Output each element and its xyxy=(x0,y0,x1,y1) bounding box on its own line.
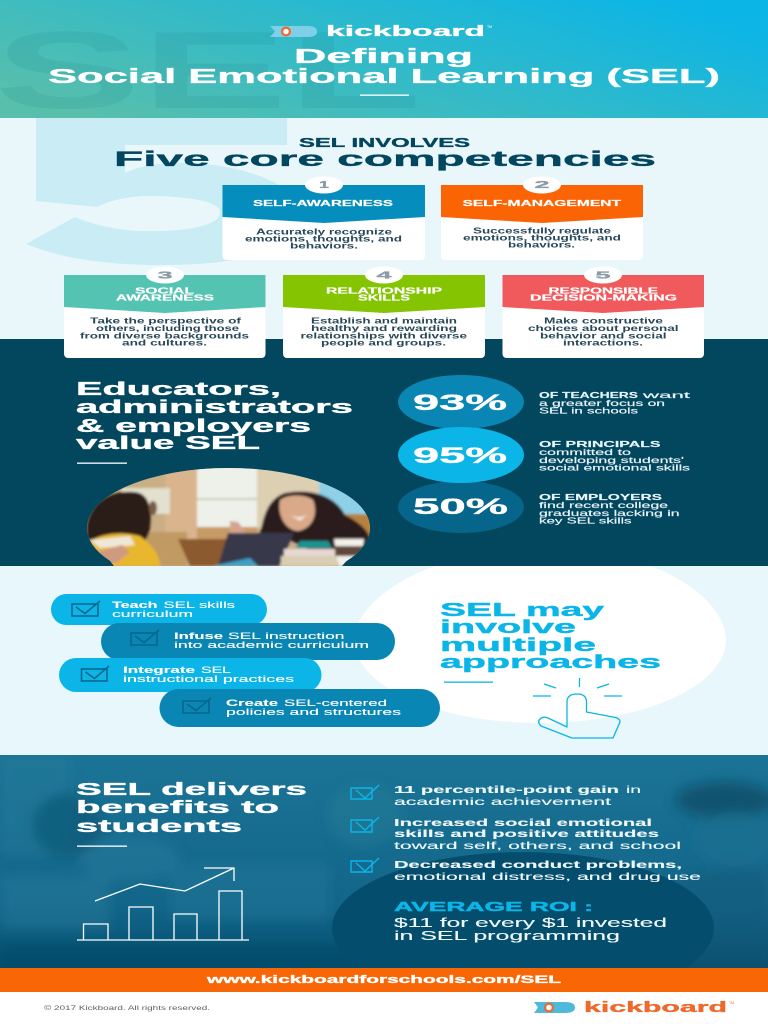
benefit 1: academic achievement: academic achievement xyxy=(394,797,611,808)
benefit 1: academic achievement xyxy=(351,785,642,808)
card 3: social awareness: and cultures. xyxy=(122,338,207,348)
panel: five core competencies xyxy=(0,118,768,339)
heading: SEL may involve multiple approaches: multiple xyxy=(440,634,596,655)
benefit 3: decreased conduct problems xyxy=(351,858,702,883)
copyright: © 2017 Kickboard. All rights reserved. xyxy=(44,1005,211,1012)
stat: 50% of employers: 50% xyxy=(413,494,508,519)
benefit 2: social emotional skills: Increased social emotional xyxy=(394,818,652,829)
card 4: relationship skills xyxy=(283,266,485,358)
section heading: SEL INVOLVES xyxy=(299,136,470,150)
benefit 1: academic achievement: in xyxy=(626,785,642,796)
title: Defining xyxy=(294,45,473,68)
card 5: responsible decision-making: interactions. xyxy=(563,338,643,348)
heading: educators value SEL: & employers xyxy=(76,416,311,436)
card 5: responsible decision-making: Make constructive xyxy=(544,316,664,326)
logo: kickboard footer: TM xyxy=(729,1001,734,1005)
icon: rising bar chart xyxy=(77,868,249,940)
callout: average ROI: $11 for every $1 invested xyxy=(394,916,667,930)
card 4: relationship skills: RELATIONSHIP xyxy=(326,286,442,296)
benefit 2: social emotional skills xyxy=(351,817,681,852)
card 1: self-awareness: 1 xyxy=(319,179,329,191)
stat: 93% of teachers: a greater focus on xyxy=(539,399,666,408)
logo: kickboard footer xyxy=(534,1000,734,1016)
stat: 93% of teachers xyxy=(398,375,692,429)
card 2: self-management: Successfully regulate xyxy=(473,226,612,236)
card 1: self-awareness: Accurately recognize xyxy=(256,228,393,236)
orange URL banner xyxy=(0,968,768,992)
card 1: self-awareness: behaviors. xyxy=(290,242,358,250)
heading: educators value SEL: value SEL xyxy=(76,433,260,453)
benefit 3: decreased conduct problems: emotional distress, and drug use xyxy=(394,872,702,883)
SEL watermark: SEL xyxy=(0,9,422,132)
ROI backdrop circle xyxy=(332,852,714,968)
card 4: relationship skills: Establish and maintain xyxy=(311,316,457,326)
stat: 95% of principals: 95% xyxy=(413,443,507,468)
pill: create xyxy=(160,689,440,727)
stat: 50% of employers: key SEL skills xyxy=(539,516,632,526)
heading: SEL delivers benefits to students xyxy=(76,779,308,847)
card 3: social awareness xyxy=(64,266,266,358)
card 3: social awareness: 3 xyxy=(158,270,173,282)
pill: infuse: Infuse xyxy=(174,631,223,641)
panel: approaches xyxy=(0,566,768,755)
pill: infuse: SEL instruction xyxy=(228,631,345,641)
card 4: relationship skills: relationships with diverse xyxy=(300,332,468,340)
pill: integrate: instructional practices xyxy=(123,674,295,684)
card 4: relationship skills: healthy and rewarding xyxy=(311,324,457,333)
stat: 93% of teachers: 93% xyxy=(413,390,507,415)
pill: integrate: SEL xyxy=(201,665,231,675)
stat: 50% of employers: graduates lacking in xyxy=(539,509,680,518)
benefit 2: social emotional skills: toward self, others, and school xyxy=(394,841,681,852)
card 3: social awareness: Take the perspective of xyxy=(90,316,242,326)
card 2: self-management xyxy=(441,176,643,260)
benefit 3: decreased conduct problems: Decreased conduct problems, xyxy=(394,860,682,871)
stat: 95% of principals xyxy=(398,427,690,483)
heading: educators value SEL xyxy=(76,379,353,464)
card 4: relationship skills: people and groups. xyxy=(321,338,446,348)
heading: SEL may involve multiple approaches: SEL may xyxy=(440,599,605,620)
stat: 50% of employers: OF EMPLOYERS xyxy=(539,493,663,502)
heading: SEL may involve multiple approaches xyxy=(440,599,661,683)
stat: 95% of principals: social emotional skills xyxy=(539,464,690,472)
pill: teach: curriculum xyxy=(112,609,193,619)
stat: 93% of teachers: OF TEACHERS xyxy=(539,391,639,400)
card 2: self-management: emotions, thoughts, and xyxy=(463,234,621,242)
pill: infuse: into academic curriculum xyxy=(174,640,369,650)
panel: benefits background xyxy=(0,755,768,968)
pill: create: Create xyxy=(226,698,278,708)
heading: SEL delivers benefits to students: students xyxy=(76,816,243,836)
pill: create: policies and structures xyxy=(226,707,402,717)
heading: SEL delivers benefits to students: SEL delivers xyxy=(76,779,308,799)
big number 5 watermark xyxy=(26,118,302,265)
pill: create: SEL-centered xyxy=(284,698,387,708)
pill: teach: SEL skills xyxy=(164,600,236,610)
benefit 2: social emotional skills: skills and positive attitudes xyxy=(394,829,660,840)
pill: integrate: Integrate xyxy=(123,665,195,675)
stat: 93% of teachers: want xyxy=(640,391,692,400)
section heading: Five core competencies xyxy=(114,148,656,171)
photo: two colleagues talking xyxy=(87,465,371,566)
card 2: self-management: behaviors. xyxy=(508,240,575,250)
card 1: self-awareness: SELF-AWARENESS xyxy=(253,199,393,208)
heading: educators value SEL: administrators xyxy=(76,397,353,417)
stat: 95% of principals: committed to xyxy=(539,448,632,457)
card 3: social awareness: AWARENESS xyxy=(116,294,214,302)
card 5: responsible decision-making: 5 xyxy=(596,270,611,282)
card 5: responsible decision-making: choices about personal xyxy=(528,324,678,333)
orange URL banner: www.kickboardforschools.com/SEL xyxy=(205,974,562,986)
card 5: responsible decision-making: behavior and social xyxy=(540,332,666,340)
section heading xyxy=(114,136,656,171)
card 4: relationship skills: 4 xyxy=(376,270,392,282)
logo: kickboard header xyxy=(270,23,492,40)
heading: SEL may involve multiple approaches: involve xyxy=(440,616,576,637)
logo: kickboard header: kickboard xyxy=(326,23,485,40)
stat: 93% of teachers: SEL in schools xyxy=(539,406,638,416)
pill: teach xyxy=(51,594,267,625)
logo: kickboard footer: kickboard xyxy=(584,1000,727,1016)
stat: 95% of principals: OF PRINCIPALS xyxy=(539,440,662,449)
title: Social Emotional Learning (SEL) xyxy=(48,65,720,88)
card 3: social awareness: SOCIAL xyxy=(135,286,194,296)
stat: 95% of principals: developing students' xyxy=(539,456,685,465)
logo: kickboard header: TM xyxy=(487,25,492,29)
callout: average ROI: AVERAGE ROI : xyxy=(394,900,593,914)
card 2: self-management: 2 xyxy=(534,179,550,191)
callout: average ROI: in SEL programming xyxy=(394,929,620,943)
card 5: responsible decision-making xyxy=(502,266,704,358)
header banner xyxy=(0,0,768,132)
card 2: self-management: SELF-MANAGEMENT xyxy=(462,199,621,208)
heading: SEL may involve multiple approaches: approaches xyxy=(440,651,661,672)
heading: educators value SEL: Educators, xyxy=(76,379,281,399)
stat: 50% of employers: find recent college xyxy=(539,501,669,510)
title xyxy=(48,45,720,96)
panel: educators background xyxy=(0,339,768,566)
heading: SEL delivers benefits to students: benefits to xyxy=(76,797,279,817)
callout: average ROI xyxy=(394,900,667,943)
card 5: responsible decision-making: RESPONSIBLE xyxy=(548,286,658,296)
benefit 1: academic achievement: 11 percentile-point gain xyxy=(394,785,619,796)
card 1: self-awareness: emotions, thoughts, and xyxy=(245,234,402,244)
pill: infuse xyxy=(101,623,395,660)
icon: pointing hand xyxy=(533,678,622,738)
card 3: social awareness: others, including those xyxy=(96,324,240,333)
card 4: relationship skills: SKILLS xyxy=(358,294,410,302)
card 5: responsible decision-making: DECISION-MAKING xyxy=(530,294,677,302)
card 3: social awareness: from diverse backgrounds xyxy=(80,332,250,340)
pill: integrate xyxy=(59,658,322,692)
card 1: self-awareness xyxy=(222,176,425,260)
pill: teach: Teach xyxy=(112,600,158,610)
stat: 50% of employers xyxy=(398,481,680,533)
